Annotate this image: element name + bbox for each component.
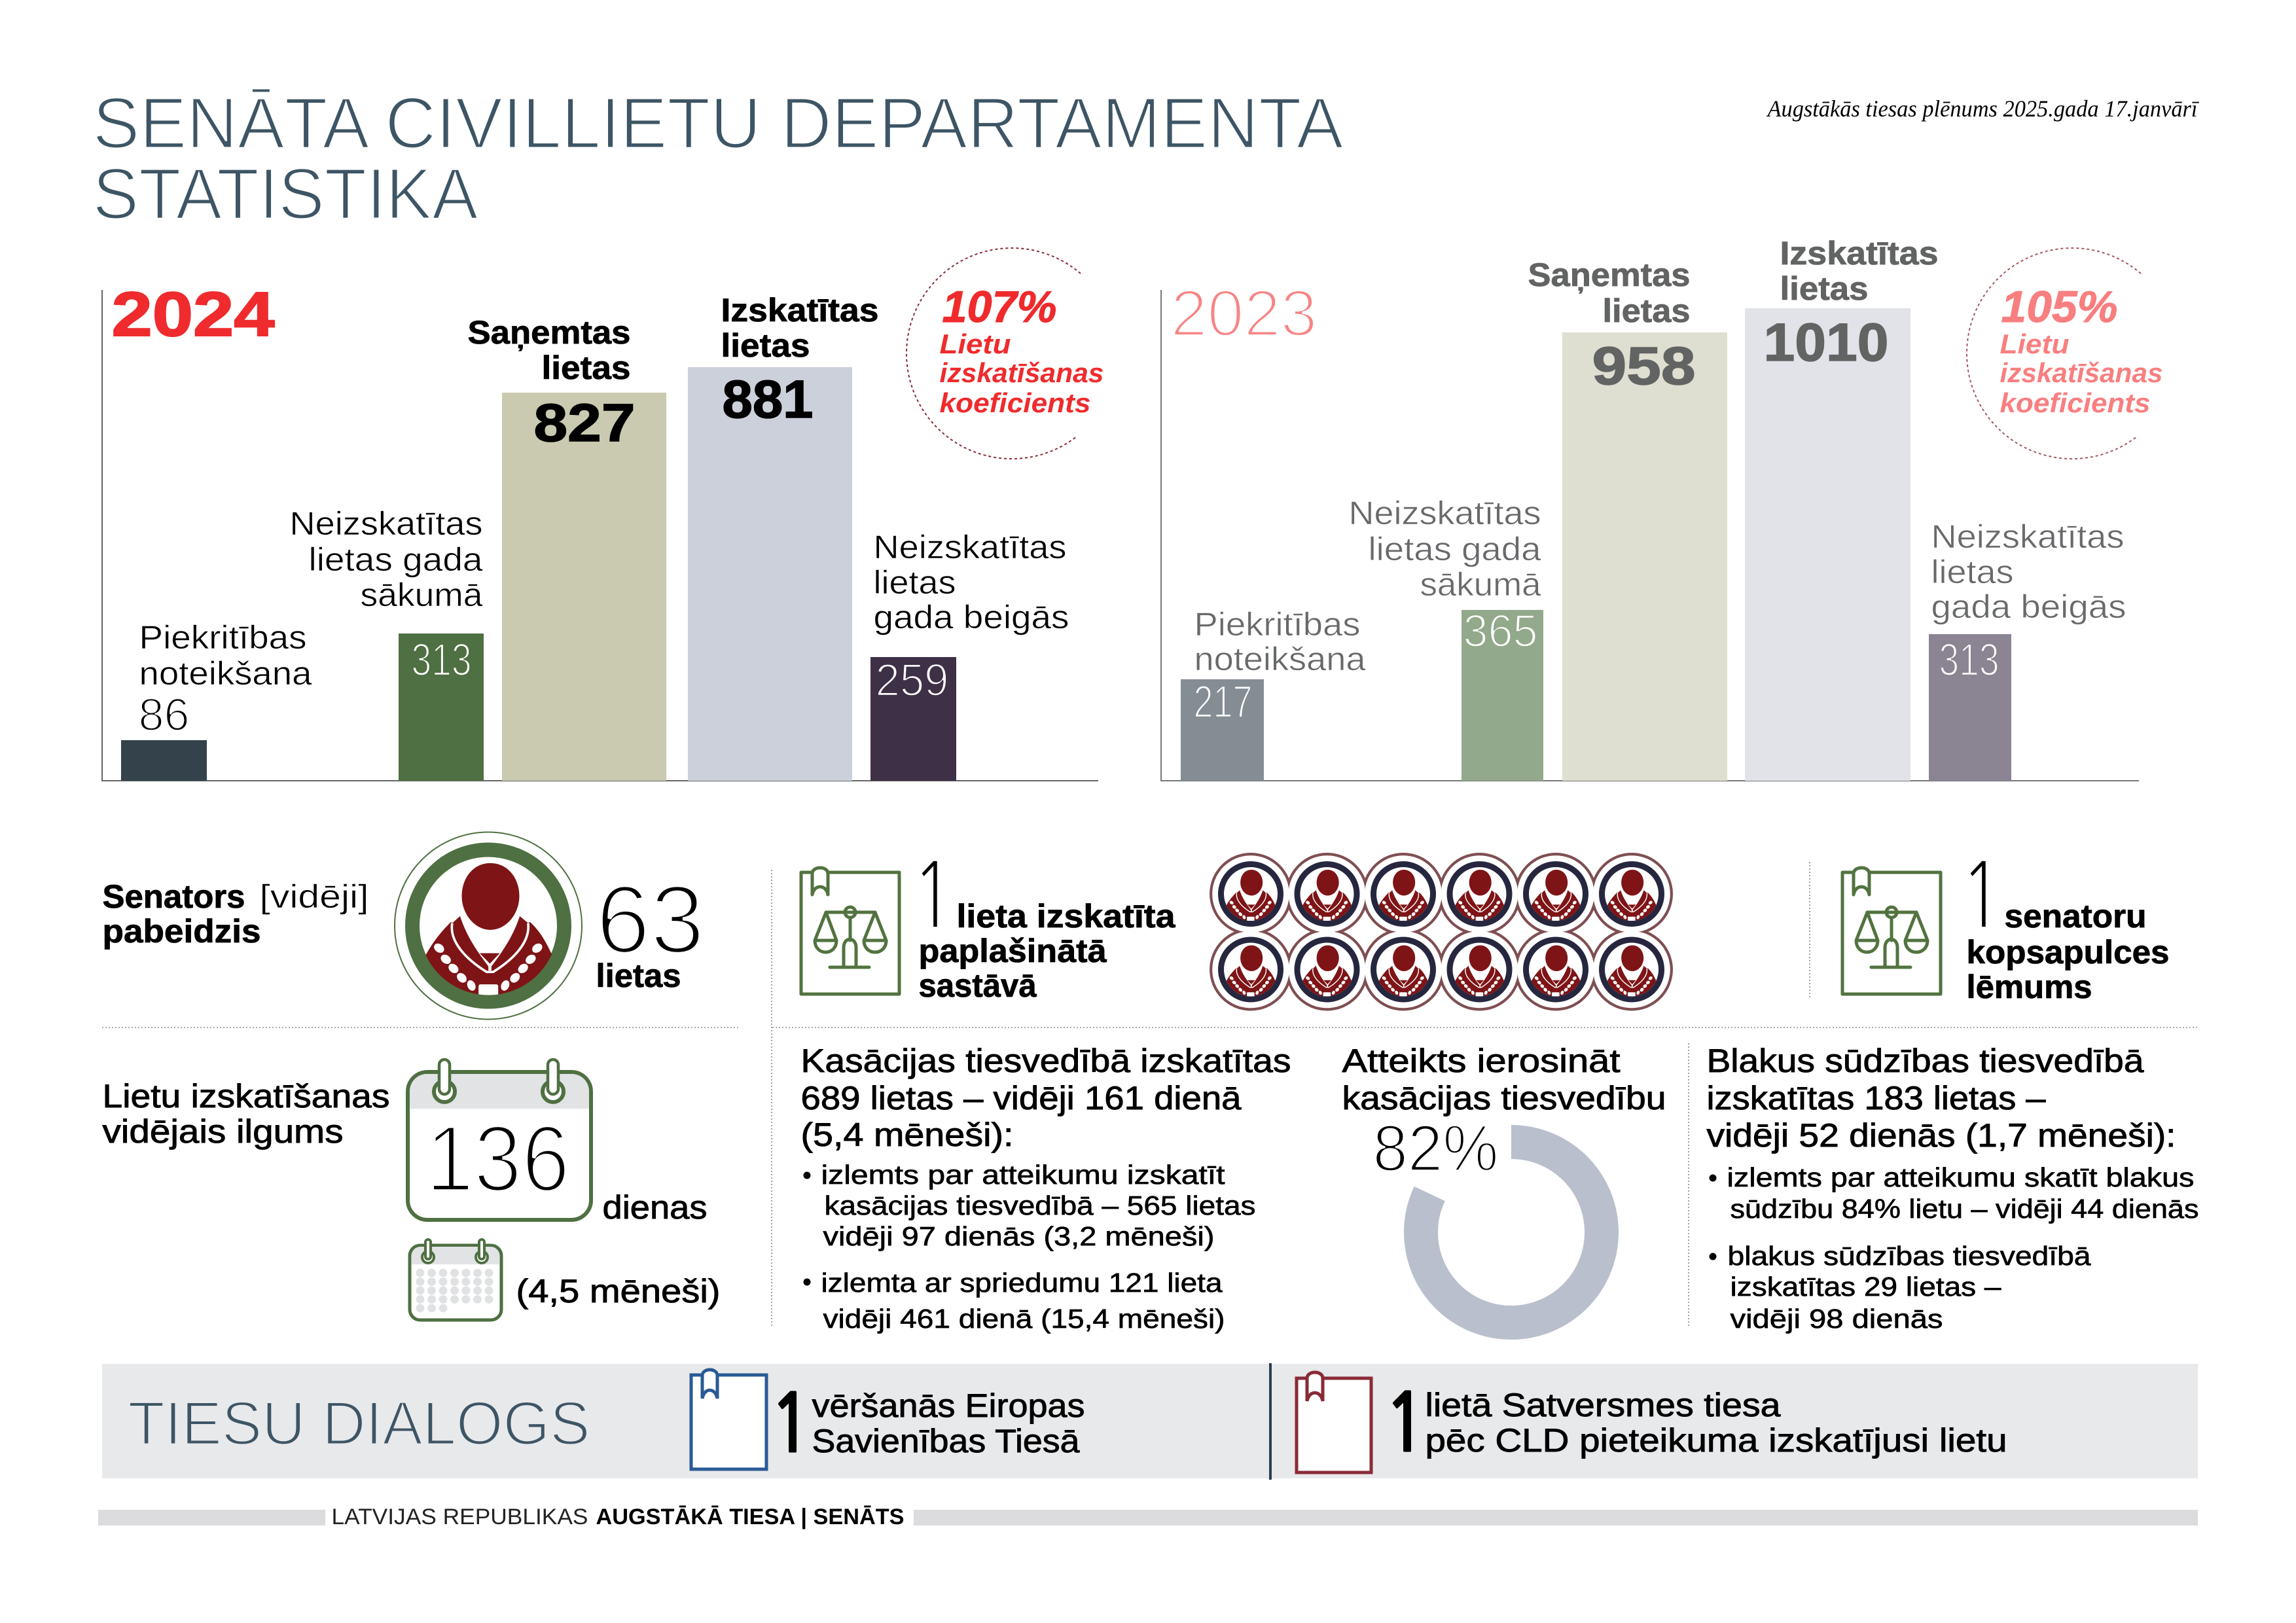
bar: Piekritības noteikšana 2023 bbox=[1181, 606, 1366, 781]
icons: twelve senators bbox=[1210, 853, 1673, 1010]
bar: Piekritības noteikšana 2023: Piekritības bbox=[1194, 606, 1360, 643]
icon: small calendar bbox=[410, 1240, 501, 1320]
chart axis 2023 bbox=[1161, 290, 2139, 781]
label: senators: pabeidzis bbox=[102, 913, 260, 950]
bar: Neizskatītas sākumā 2024: Neizskatītas bbox=[289, 505, 483, 542]
bar: Neizskatītas sākumā 2024: sākumā bbox=[360, 577, 483, 613]
number 82%: 82% bbox=[1373, 1112, 1499, 1185]
label: duration bbox=[102, 1078, 390, 1150]
bar: Izskatītas lietas 2024 bbox=[688, 292, 878, 781]
number 136: 136 bbox=[425, 1106, 569, 1211]
icon: blue book bbox=[691, 1370, 766, 1469]
bar: Saņemtas lietas 2023: Saņemtas bbox=[1528, 257, 1690, 293]
bar: Neizskatītas sākumā 2023: Neizskatītas bbox=[1348, 495, 1541, 531]
bar: Saņemtas lietas 2024: lietas bbox=[542, 349, 631, 386]
number 1: 1 bbox=[1960, 850, 2003, 940]
text: senators' assembly bbox=[1966, 898, 2169, 1005]
callout: koeficients 107%: 107% bbox=[942, 282, 1056, 332]
bar: Neizskatītas sākumā 2023: 365 bbox=[1463, 605, 1538, 656]
bar: Neizskatītas beigās 2024: Neizskatītas bbox=[873, 529, 1067, 565]
heading: ancillary complaints: vidēji 52 dienās (1,7 mēneši): bbox=[1707, 1117, 2176, 1154]
bar: Neizskatītas beigās 2024: gada beigās bbox=[873, 599, 1069, 635]
bar: Izskatītas lietas 2023: Izskatītas bbox=[1780, 235, 1939, 272]
list: cassation details: kasācijas tiesvedībā – 565 lietas bbox=[825, 1190, 1255, 1221]
bar: Neizskatītas beigās 2024: 259 bbox=[876, 654, 949, 705]
callout: koeficients 105%: 105% bbox=[2001, 282, 2118, 332]
bar: Neizskatītas beigās 2023: lietas bbox=[1931, 554, 2013, 590]
callout: koeficients 105%: Lietu bbox=[2000, 329, 2070, 359]
bar: Piekritības noteikšana 2023: noteikšana bbox=[1194, 641, 1366, 677]
text: senators' assembly: kopsapulces bbox=[1966, 934, 2169, 971]
bar: Neizskatītas beigās 2023: Neizskatītas bbox=[1931, 518, 2125, 555]
label: duration: Lietu izskatīšanas bbox=[102, 1078, 390, 1115]
text: extended composition: paplašinātā bbox=[919, 933, 1107, 969]
callout: koeficients 107%: Lietu bbox=[940, 329, 1011, 359]
text: senators' assembly: senatoru bbox=[2004, 898, 2147, 935]
bar: Neizskatītas sākumā 2024: 313 bbox=[411, 634, 471, 685]
panel: senators average bbox=[102, 832, 704, 1020]
bar: Neizskatītas sākumā 2023: lietas gada bbox=[1368, 531, 1541, 567]
bar: Neizskatītas sākumā 2023 bbox=[1348, 495, 1543, 781]
heading: ancillary complaints: Blakus sūdzības tiesvedībā bbox=[1707, 1043, 2144, 1079]
bar: Piekritības noteikšana 2024: noteikšana bbox=[139, 655, 312, 692]
label: months: (4,5 mēneši) bbox=[516, 1273, 720, 1310]
bar: Izskatītas lietas 2023 bbox=[1745, 235, 1939, 781]
footer: LATVIJAS REPUBLIKAS bbox=[331, 1505, 588, 1529]
bar: Saņemtas lietas 2024 bbox=[467, 314, 666, 781]
callout: koeficients 107%: izskatīšanas bbox=[940, 357, 1103, 388]
bar: Neizskatītas sākumā 2023: sākumā bbox=[1420, 566, 1541, 603]
number 1: 1 bbox=[911, 850, 954, 940]
icon: book with scales bbox=[1842, 868, 1941, 994]
callout: koeficients 107% bbox=[906, 248, 1103, 459]
bar: Izskatītas lietas 2024: Izskatītas bbox=[721, 292, 878, 329]
bar: Neizskatītas sākumā 2024: lietas gada bbox=[309, 541, 483, 578]
list: cassation details: vidēji 461 dienā (15,4 mēneši) bbox=[823, 1304, 1225, 1334]
panel: senators' assembly bbox=[1842, 850, 2169, 1005]
list: cassation details: izlemta ar spriedumu 121 lieta bbox=[821, 1268, 1223, 1298]
year 2023: 2023 bbox=[1170, 277, 1317, 350]
bar: Saņemtas lietas 2024: Saņemtas bbox=[467, 314, 631, 351]
heading: cassation bbox=[801, 1043, 1291, 1153]
heading: refused cassation: Atteikts ierosināt bbox=[1342, 1043, 1621, 1079]
text: extended composition: sastāvā bbox=[919, 967, 1037, 1004]
panel: ancillary complaints bbox=[1707, 1043, 2199, 1334]
list: ancillary details: sūdzību 84% lietu – vidēji 44 dienās bbox=[1731, 1194, 2199, 1224]
text: European court bbox=[812, 1387, 1085, 1459]
callout: koeficients 105%: izskatīšanas bbox=[2000, 357, 2162, 388]
title bbox=[93, 83, 1344, 234]
heading: refused cassation bbox=[1342, 1043, 1666, 1116]
text: European court: vēršanās Eiropas bbox=[812, 1387, 1085, 1424]
text: Constitutional court: lietā Satversmes tiesa bbox=[1426, 1387, 1781, 1423]
list: ancillary details: vidēji 98 dienās bbox=[1731, 1304, 1943, 1334]
bar: Neizskatītas beigās 2024 bbox=[870, 529, 1069, 781]
title: STATISTIKA bbox=[93, 154, 478, 234]
bar: Saņemtas lietas 2023 bbox=[1528, 257, 1727, 781]
callout: koeficients 107%: koeficients bbox=[940, 387, 1090, 418]
bar: Izskatītas lietas 2023: 1010 bbox=[1763, 313, 1889, 372]
date note: Augstākās tiesas plēnums 2025.gada 17.janvārī bbox=[1767, 96, 2199, 122]
panel: cassation bbox=[801, 1043, 1291, 1334]
bar: Saņemtas lietas 2023: lietas bbox=[1602, 293, 1690, 329]
bar: Neizskatītas beigās 2023: gada beigās bbox=[1931, 588, 2126, 625]
panel: refused cassation bbox=[1342, 1043, 1666, 1323]
callout: koeficients 105% bbox=[1967, 248, 2162, 459]
number 1: 1 bbox=[768, 1385, 813, 1465]
label: senators: Senators bbox=[102, 878, 245, 915]
icon: big calendar bbox=[408, 1060, 591, 1220]
bar: Neizskatītas beigās 2023 bbox=[1929, 518, 2126, 781]
list: cassation details: izlemts par atteikumu izskatīt bbox=[821, 1160, 1225, 1190]
text: Constitutional court: pēc CLD pieteikuma izskatījusi lietu bbox=[1426, 1422, 2007, 1459]
icon: senator badge bbox=[395, 832, 582, 1020]
label: senators: [vidēji] bbox=[259, 878, 369, 915]
panel: 2024 chart bbox=[102, 248, 1103, 781]
bar: Izskatītas lietas 2024: 881 bbox=[723, 370, 813, 429]
callout: koeficients 105%: koeficients bbox=[2000, 387, 2151, 418]
number 1: 1 bbox=[1384, 1384, 1428, 1464]
number 63: 63 bbox=[596, 866, 704, 974]
icon: book with scales bbox=[801, 868, 899, 994]
bar: Izskatītas lietas 2024: lietas bbox=[721, 327, 810, 364]
year 2024: 2024 bbox=[111, 279, 275, 349]
list: ancillary details: izskatītas 29 lietas – bbox=[1731, 1272, 2001, 1302]
heading: cassation: Kasācijas tiesvedībā izskatītas bbox=[801, 1043, 1291, 1079]
panel: Tiesu dialogs bbox=[102, 1363, 2198, 1480]
bar: Piekritības noteikšana 2024 bbox=[121, 619, 312, 781]
title: SENĀTA CIVILLIETU DEPARTAMENTA bbox=[93, 83, 1344, 164]
text: Constitutional court bbox=[1426, 1387, 2007, 1459]
heading: cassation: (5,4 mēneši): bbox=[801, 1116, 1013, 1153]
bar: Piekritības noteikšana 2024: 86 bbox=[139, 689, 190, 740]
list: cassation details bbox=[804, 1160, 1255, 1334]
chart axis 2024 bbox=[102, 290, 1098, 781]
text: extended composition bbox=[919, 898, 1176, 1004]
heading: refused cassation: kasācijas tiesvedību bbox=[1342, 1080, 1666, 1116]
text: European court: Savienības Tiesā bbox=[812, 1423, 1080, 1459]
divider bbox=[1269, 1363, 1272, 1480]
bar: Piekritības noteikšana 2023: 217 bbox=[1194, 676, 1253, 727]
list: ancillary details bbox=[1710, 1162, 2199, 1334]
bar: Neizskatītas sākumā 2024 bbox=[289, 505, 484, 781]
bar: Saņemtas lietas 2023: 958 bbox=[1592, 336, 1695, 396]
heading: cassation: 689 lietas – vidēji 161 dienā bbox=[801, 1080, 1242, 1116]
bar: Neizskatītas beigās 2023: 313 bbox=[1939, 634, 1999, 685]
heading: Tiesu dialogs: TIESU DIALOGS bbox=[128, 1389, 590, 1457]
footer: AUGSTĀKĀ TIESA | SENĀTS bbox=[596, 1505, 905, 1529]
panel: average duration bbox=[102, 1060, 720, 1320]
panel: 2023 chart bbox=[1161, 235, 2162, 781]
list: ancillary details: blakus sūdzības tiesvedībā bbox=[1728, 1241, 2091, 1271]
label: dienas: dienas bbox=[602, 1189, 707, 1226]
list: cassation details: vidēji 97 dienās (3,2 mēneši) bbox=[823, 1221, 1215, 1251]
donut chart 82% bbox=[1421, 1142, 1602, 1323]
text: extended composition: lieta izskatīta bbox=[957, 898, 1176, 935]
heading: ancillary complaints: izskatītas 183 lietas – bbox=[1707, 1080, 2046, 1116]
list: ancillary details: izlemts par atteikumu skatīt blakus bbox=[1727, 1162, 2194, 1192]
bar: Izskatītas lietas 2023: lietas bbox=[1780, 270, 1868, 307]
bar: Saņemtas lietas 2024: 827 bbox=[534, 393, 635, 453]
label: lietas: lietas bbox=[596, 957, 681, 994]
bar: Piekritības noteikšana 2024: Piekritības bbox=[139, 619, 306, 656]
icon: red book bbox=[1297, 1372, 1371, 1472]
heading: ancillary complaints bbox=[1707, 1043, 2176, 1154]
panel: extended composition bbox=[801, 850, 1176, 1004]
text: senators' assembly: lēmums bbox=[1966, 969, 2092, 1005]
footer bbox=[98, 1505, 2198, 1529]
label: duration: vidējais ilgums bbox=[102, 1113, 343, 1150]
bar: Neizskatītas beigās 2024: lietas bbox=[873, 564, 956, 601]
panel background bbox=[102, 1364, 2198, 1478]
label: senators bbox=[102, 878, 369, 950]
